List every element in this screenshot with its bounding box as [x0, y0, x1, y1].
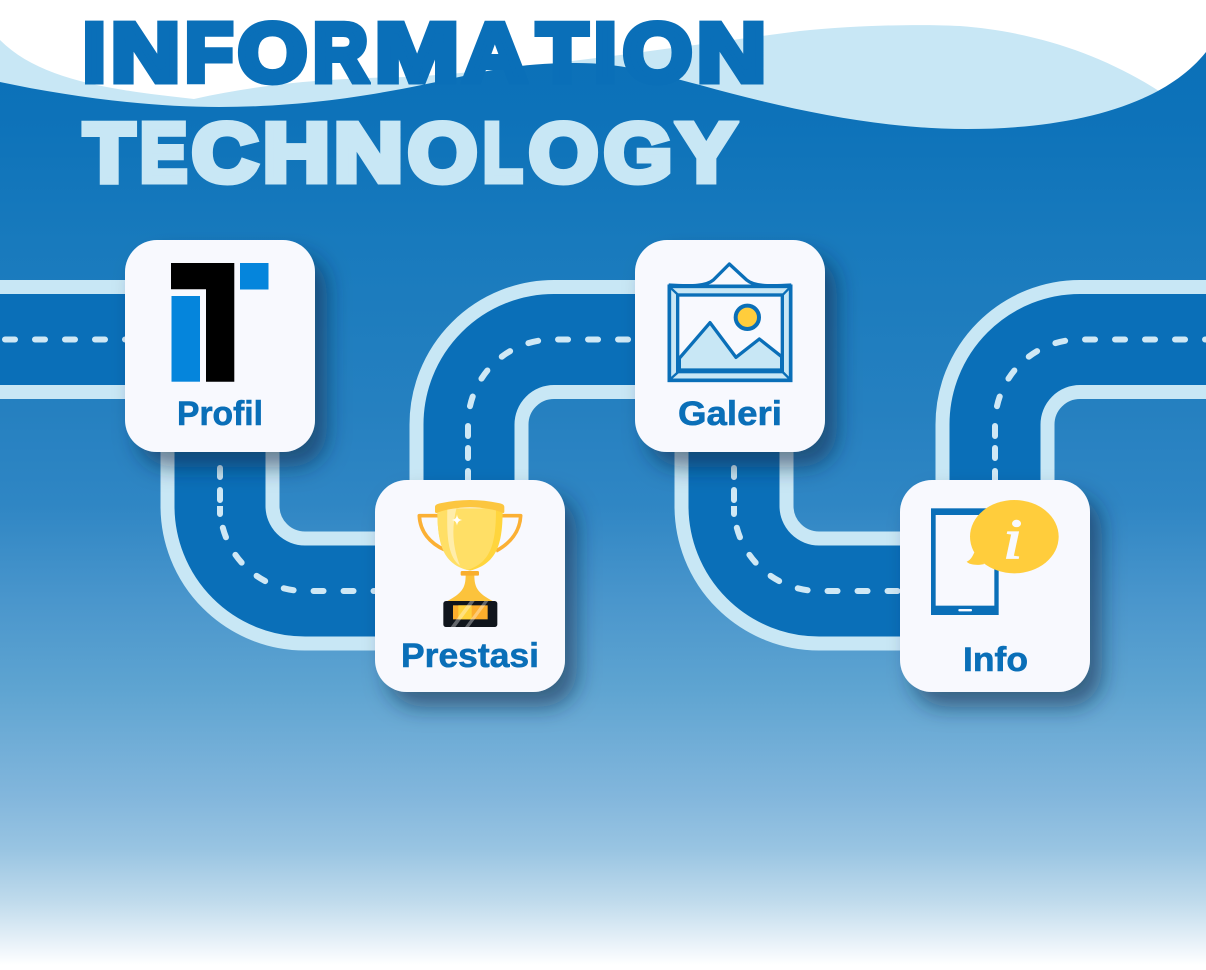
- road border: [0, 340, 1206, 591]
- title line: information: A: [463, 6, 526, 99]
- title line: information: M: [375, 6, 459, 99]
- label: Profil: Profil: [177, 395, 263, 433]
- title line: technology: [81, 106, 740, 199]
- title line: technology: T: [84, 106, 134, 199]
- icon: framed picture: [669, 264, 791, 380]
- card: Profil: [125, 240, 315, 452]
- title line: technology: L: [483, 106, 522, 199]
- icon: IT logo: [171, 263, 268, 382]
- title line: technology: C: [192, 106, 257, 199]
- card: Info: [900, 480, 1090, 692]
- title line: technology: N: [334, 106, 403, 199]
- icon: tablet with info bubble: [931, 500, 1059, 615]
- card: Galeri: [635, 240, 825, 452]
- label: Prestasi: Prestasi: [401, 637, 539, 675]
- title line: information: N: [111, 6, 180, 99]
- title line: information: O: [623, 6, 692, 99]
- title line: information: O: [238, 6, 307, 99]
- road centre dashes: [5, 340, 1206, 591]
- label: Info: Info: [963, 641, 1028, 679]
- road: [0, 340, 1206, 591]
- road surface: [0, 340, 1206, 591]
- icon: trophy: [419, 500, 521, 627]
- title line: technology: O: [408, 106, 477, 199]
- title line: technology: G: [604, 106, 672, 199]
- label: Galeri: Galeri: [678, 395, 782, 433]
- title line: information: R: [313, 6, 368, 99]
- header waves: [0, 0, 1206, 150]
- icon: tablet with info bubble: i: [1003, 509, 1022, 571]
- title line: information: F: [185, 6, 233, 99]
- title line: technology: E: [140, 106, 187, 199]
- title line: information: I: [83, 6, 106, 99]
- title line: information: N: [697, 6, 766, 99]
- title: [81, 6, 766, 199]
- title line: technology: Y: [677, 106, 735, 199]
- title line: information: T: [537, 6, 587, 99]
- title line: information: [83, 6, 766, 99]
- title line: information: I: [594, 6, 617, 99]
- title line: technology: O: [529, 106, 598, 199]
- card: Prestasi: [375, 480, 565, 692]
- title line: technology: H: [263, 106, 330, 199]
